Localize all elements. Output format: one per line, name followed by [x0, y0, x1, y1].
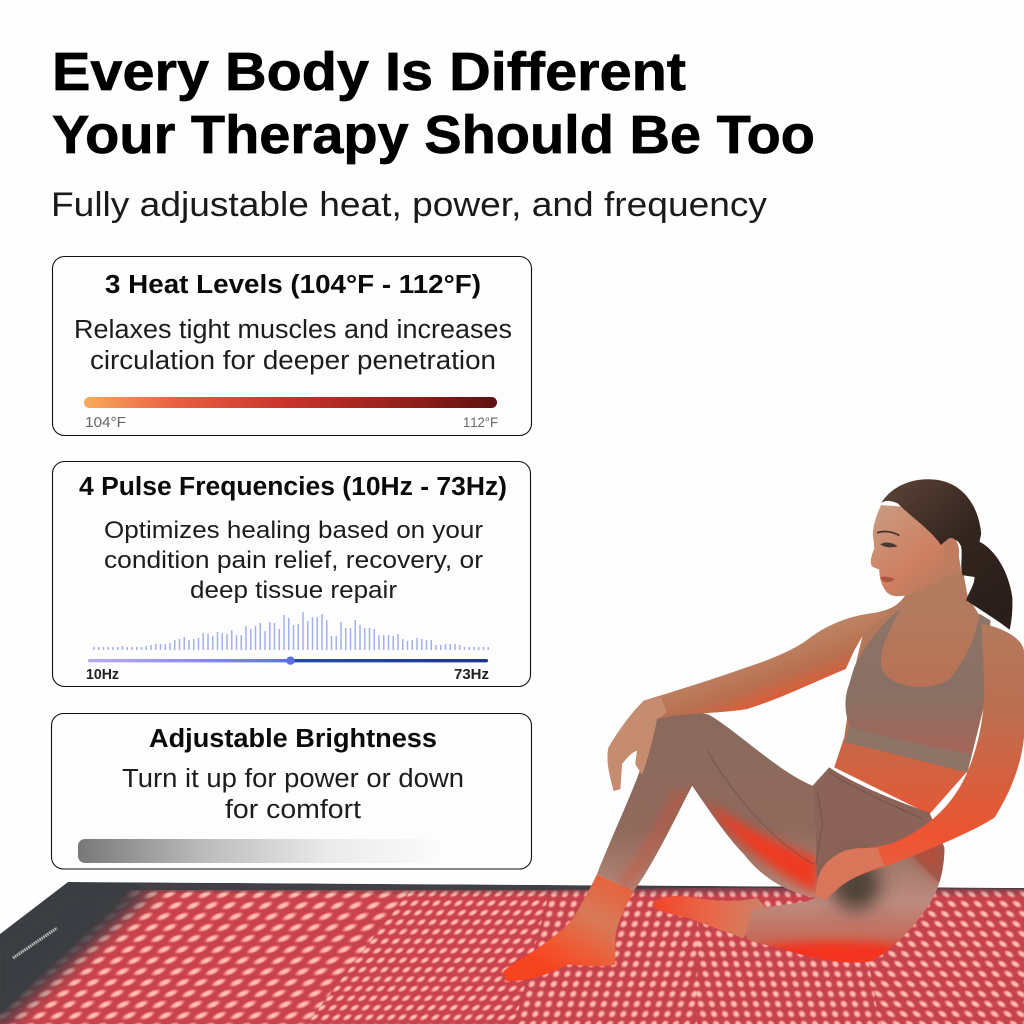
- heading: 4 Pulse Frequencies (10Hz - 73Hz): [79, 473, 507, 501]
- lower foot: [652, 896, 766, 939]
- brightness gradient bar: [78, 839, 440, 863]
- face: [871, 505, 961, 596]
- title line 1: Every Body Is Different: [52, 42, 686, 102]
- hair and ponytail: [881, 479, 1012, 630]
- title line 2: Your Therapy Should Be Too: [52, 105, 815, 165]
- standing ankle and foot: [503, 874, 634, 981]
- LED panel 4: [697, 888, 880, 1024]
- woman seated on mat: [503, 479, 1024, 981]
- panel: brightness: [52, 714, 532, 869]
- hip red shade: [908, 844, 944, 886]
- hip brown shade: [816, 768, 944, 882]
- panel: pulse frequencies: [52, 462, 530, 686]
- LED panel 5: [855, 888, 1024, 1024]
- LED panel 2: [307, 890, 550, 1024]
- description: Optimizes healing based on your: [104, 517, 483, 544]
- card outline: [52, 256, 532, 436]
- near arm and hand on hip: [816, 624, 1024, 899]
- description: [122, 765, 464, 824]
- slider thumb: [286, 656, 295, 665]
- hand on hip peach tone: [816, 848, 884, 899]
- ear: [943, 538, 959, 566]
- heading: 3 Heat Levels (104°F - 112°F): [105, 271, 481, 299]
- subtitle: Fully adjustable heat, power, and frequency: [51, 186, 768, 224]
- mat dark base: [0, 882, 1024, 1024]
- description: [74, 316, 512, 375]
- panel: heat levels: [52, 256, 532, 436]
- title: [52, 42, 815, 165]
- LED panel 1 grid: [0, 890, 410, 1024]
- heat gradient bar: [84, 397, 497, 408]
- description: Turn it up for power or down: [122, 765, 464, 793]
- torso skin: [834, 570, 991, 814]
- mat brand label: [13, 928, 57, 958]
- shin side glow: [617, 791, 690, 891]
- raised thigh red glow: [704, 801, 817, 894]
- mat top shading: [140, 884, 1024, 897]
- bra underband: [844, 727, 972, 772]
- sports bra: [844, 609, 990, 772]
- eye: [880, 542, 898, 547]
- thigh red glow: [757, 942, 911, 964]
- eyebrow: [877, 532, 899, 535]
- description: [104, 517, 483, 604]
- head: [871, 479, 1012, 630]
- card outline: [52, 714, 532, 869]
- frequency slider track: [88, 659, 488, 662]
- description: circulation for deeper penetration: [90, 347, 496, 375]
- waveform: [94, 612, 488, 650]
- legging seams: [707, 751, 923, 864]
- red light therapy mat: [0, 860, 1024, 1024]
- lips: [880, 577, 895, 582]
- scale label min: 104°F: [85, 414, 126, 431]
- card outline: [52, 462, 530, 686]
- description: condition pain relief, recovery, or: [104, 547, 483, 574]
- leggings base: [594, 704, 948, 971]
- leggings: [594, 704, 948, 971]
- white cut-out above mat corner: [0, 860, 1024, 934]
- heading: Adjustable Brightness: [149, 725, 437, 753]
- LED panel 3: [515, 888, 697, 1024]
- hand on knee: [608, 697, 667, 791]
- scale label min: 10Hz: [86, 667, 119, 683]
- description: for comfort: [225, 796, 361, 824]
- scale label max: 73Hz: [454, 667, 489, 683]
- thigh shadow: [832, 858, 880, 910]
- description: deep tissue repair: [190, 577, 397, 604]
- mat dark corner fade: [0, 884, 160, 1024]
- description: Relaxes tight muscles and increases: [74, 316, 512, 344]
- scale label max: 112°F: [463, 414, 498, 430]
- far arm resting on knee: [608, 612, 891, 791]
